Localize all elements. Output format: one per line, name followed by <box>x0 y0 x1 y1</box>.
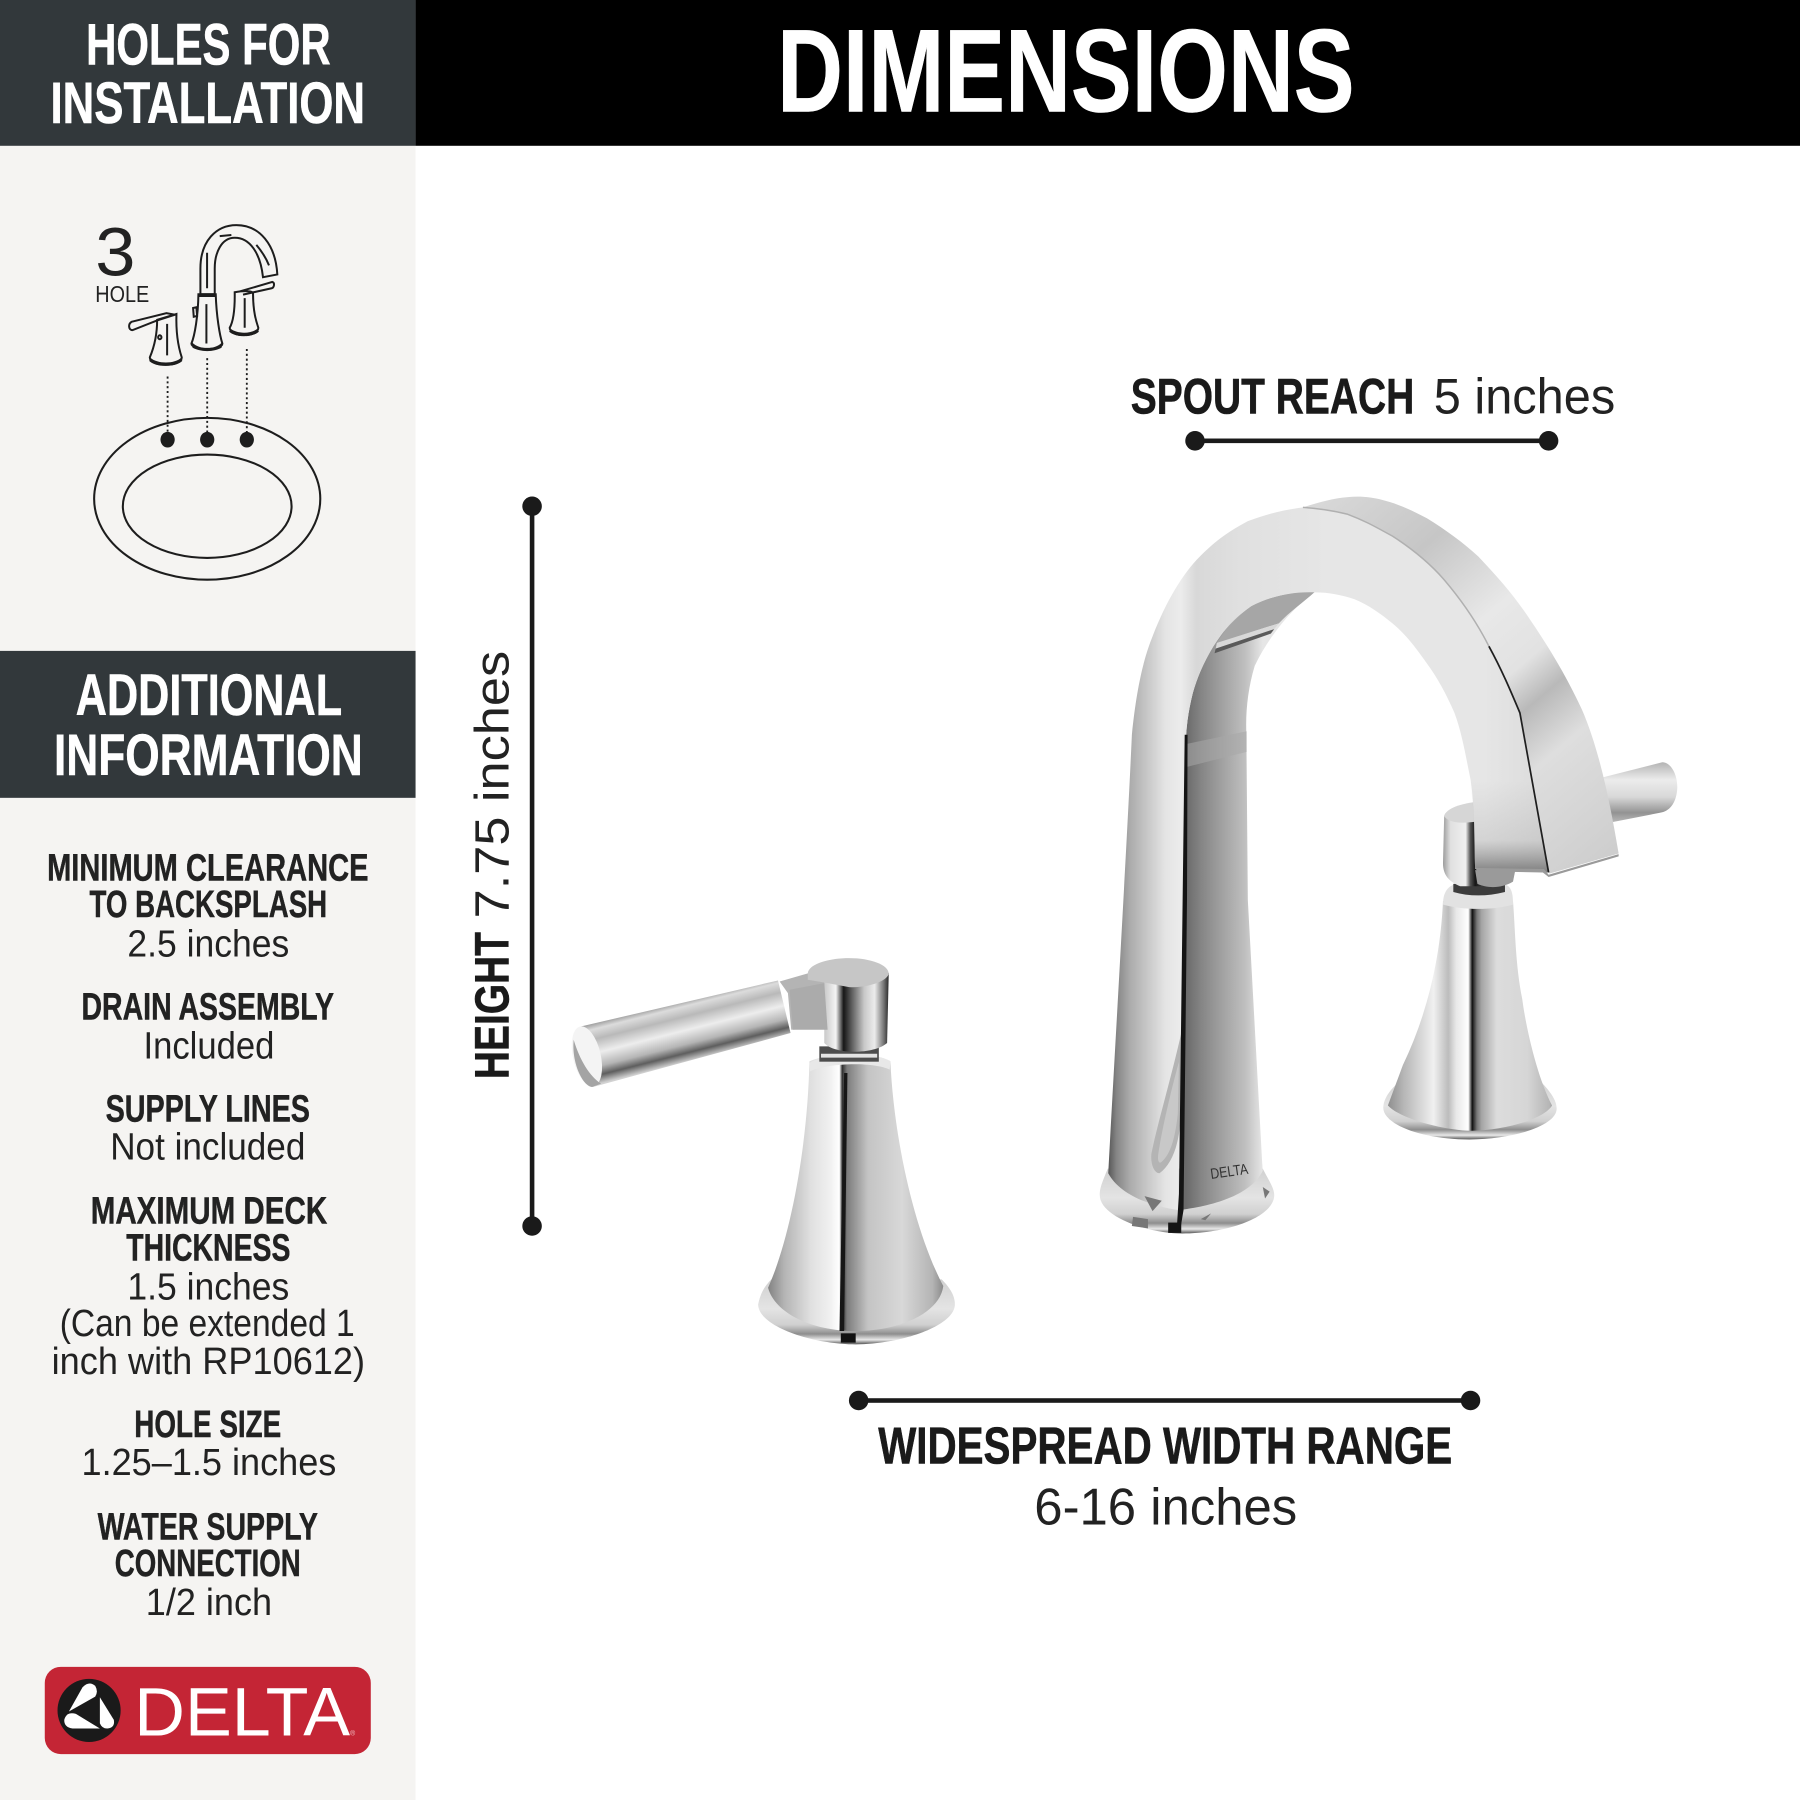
spout ridge line <box>1303 507 1549 872</box>
inner upper reflection <box>1217 591 1316 643</box>
spout tip shading <box>1469 781 1549 872</box>
spec: maximum deck thickness: THICKNESS <box>126 1227 290 1269</box>
spec: hole size <box>82 1404 336 1484</box>
spec: water supply connection: WATER SUPPLY <box>98 1506 318 1548</box>
spec: supply lines: SUPPLY LINES <box>106 1089 310 1131</box>
arrow: width measure <box>849 1391 1480 1410</box>
dimension: spout reach <box>1131 367 1615 451</box>
left handle cone <box>768 1055 943 1331</box>
spec: drain assembly: DRAIN ASSEMBLY <box>82 986 334 1028</box>
spec: drain assembly: Included <box>143 1025 274 1067</box>
panel heading: holes for installation <box>0 0 416 146</box>
panel heading: additional information <box>0 651 416 798</box>
illustration: chrome left handle <box>567 958 955 1344</box>
arrow: height measure <box>522 496 542 1236</box>
spec: minimum clearance: 2.5 inches <box>127 923 289 965</box>
dotted guide lines <box>168 349 247 436</box>
hole count label: HOLE <box>95 281 149 307</box>
spout inner face <box>1180 591 1316 1210</box>
dimension: height: HEIGHT <box>466 932 520 1079</box>
right handle collar and neck <box>1443 884 1513 909</box>
spec: minimum clearance: MINIMUM CLEARANCE <box>47 847 368 889</box>
spec: supply lines: Not included <box>110 1126 305 1168</box>
spec: maximum deck thickness: (Can be extended 1 <box>60 1303 355 1345</box>
sidebar background <box>0 0 416 1800</box>
spout inner lower overlay <box>1180 1102 1263 1210</box>
icon: sink basin <box>94 418 320 580</box>
right handle knob <box>1443 801 1515 887</box>
illustration: chrome spout and right handle <box>1100 497 1677 1233</box>
dimension: spout reach: SPOUT REACH <box>1131 367 1414 424</box>
spout outer side face <box>1303 497 1619 874</box>
dimension: height <box>466 496 542 1236</box>
right handle rear lever <box>1590 762 1677 825</box>
right handle cone <box>1388 893 1552 1131</box>
dimension: widespread width range: WIDESPREAD WIDTH RANGE <box>878 1417 1452 1475</box>
dimension: widespread width range: 6-16 inches <box>1034 1477 1297 1535</box>
panel heading: additional information: INFORMATION <box>54 723 363 788</box>
trunk center line <box>1177 735 1188 1231</box>
spec: water supply connection: CONNECTION <box>115 1543 301 1585</box>
spec: water supply connection <box>98 1506 318 1624</box>
panel heading: holes for installation: INSTALLATION <box>51 71 365 136</box>
spec: minimum clearance <box>47 847 368 965</box>
icon: line-art faucet <box>129 225 277 365</box>
spout base <box>1100 1169 1274 1233</box>
spec: maximum deck thickness: inch with RP10612) <box>52 1341 365 1383</box>
right handle base <box>1383 1079 1557 1139</box>
spout tip lip <box>1475 854 1619 877</box>
arrow: spout reach measure <box>1185 431 1558 451</box>
logo: Delta: DELTA <box>134 1674 350 1751</box>
left handle neck and knob <box>790 958 890 1071</box>
base center mark <box>1168 1223 1181 1233</box>
spec: hole size: HOLE SIZE <box>134 1404 281 1446</box>
spec: maximum deck thickness: MAXIMUM DECK <box>91 1191 327 1233</box>
spec: minimum clearance: TO BACKSPLASH <box>90 884 327 926</box>
panel heading: holes for installation: HOLES FOR <box>86 12 331 77</box>
spec list <box>47 847 368 1624</box>
faucet brand mark: DELTA <box>1209 1161 1249 1183</box>
spec: hole size: 1.25–1.5 inches <box>82 1442 336 1484</box>
icon: three hole sink with faucet <box>94 214 320 580</box>
title: DIMENSIONS <box>777 5 1355 137</box>
panel heading: additional information: ADDITIONAL <box>76 663 342 728</box>
spec: maximum deck thickness: 1.5 inches <box>127 1266 289 1308</box>
dimension: height: 7.75 inches <box>466 651 520 918</box>
inner lower reflection <box>1187 731 1247 767</box>
title banner <box>416 0 1800 146</box>
hole count label: 3 <box>95 214 135 291</box>
left handle lever <box>567 971 828 1089</box>
logo: Delta <box>45 1667 371 1754</box>
spec: drain assembly <box>82 986 334 1067</box>
left handle base <box>758 1279 955 1344</box>
spec: water supply connection: 1/2 inch <box>146 1582 272 1624</box>
spec: supply lines <box>106 1089 310 1168</box>
hole count label <box>95 214 149 307</box>
left handle center line <box>839 1073 847 1331</box>
logo: Delta: ® <box>350 1730 355 1738</box>
left handle base marks <box>841 1333 856 1343</box>
spout front face <box>1108 507 1549 1210</box>
trunk reflection <box>1151 1033 1181 1173</box>
dimension: widespread width range <box>849 1391 1480 1535</box>
base detail marks <box>1132 1187 1270 1228</box>
spec: maximum deck thickness <box>52 1191 365 1383</box>
dimension: spout reach: 5 inches <box>1434 367 1615 424</box>
